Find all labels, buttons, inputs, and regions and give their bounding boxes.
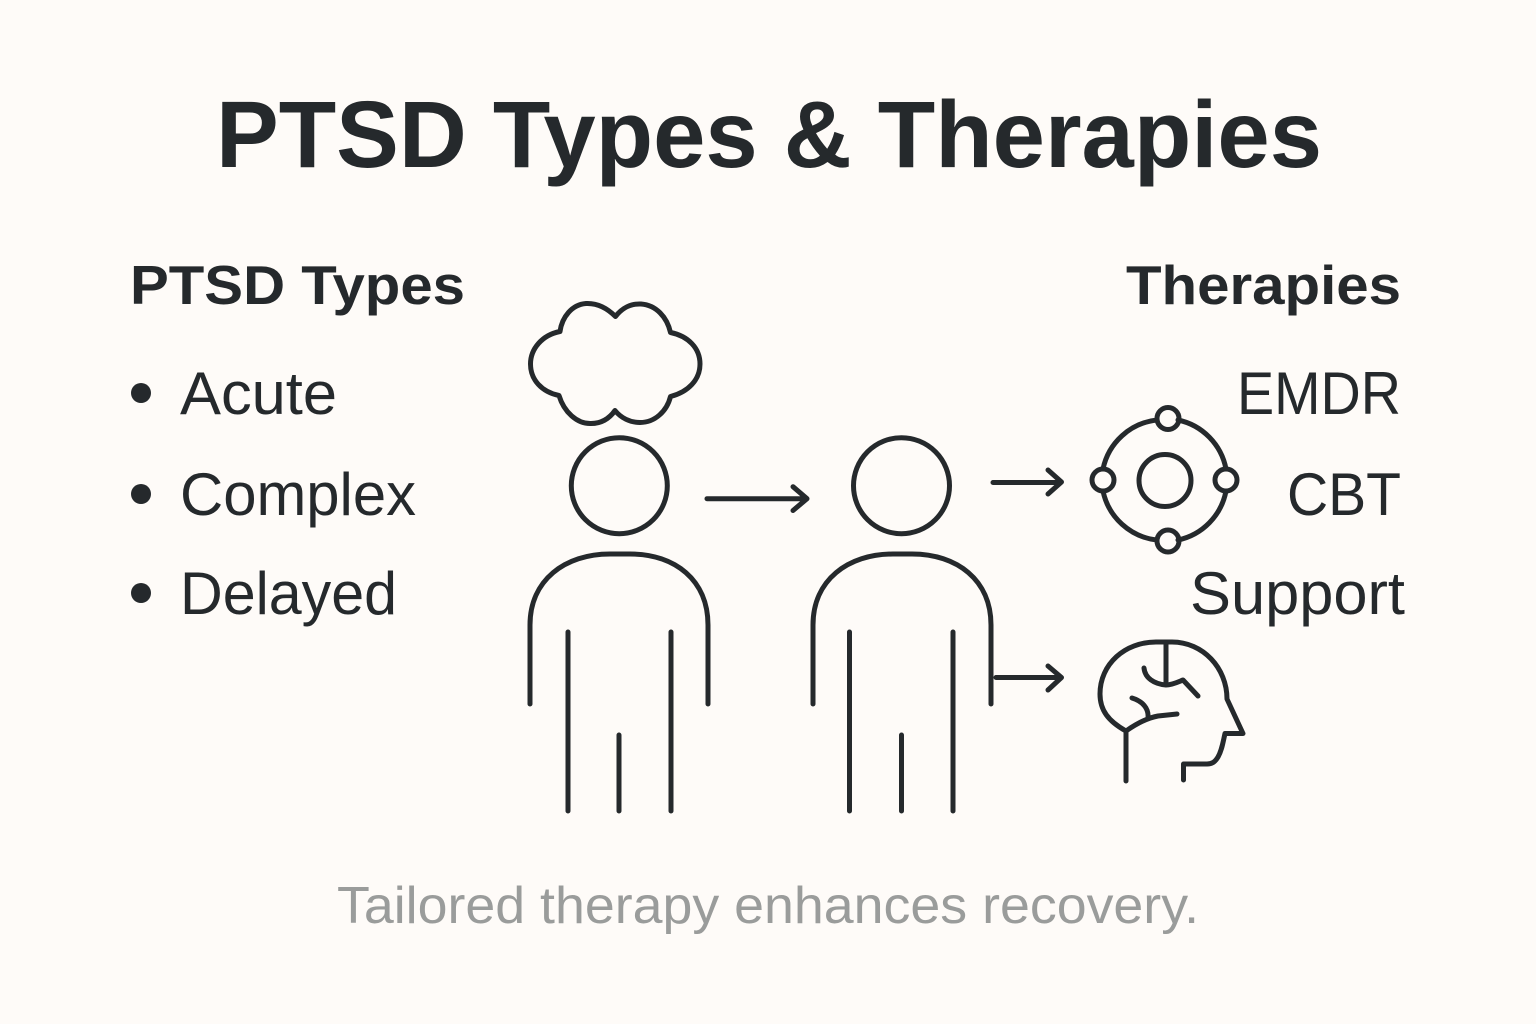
panel: PTSD types list xyxy=(130,254,465,627)
therapy: Support: Support xyxy=(1190,560,1405,627)
icon: head with brain xyxy=(1100,642,1243,781)
arrow: to brain icon xyxy=(996,666,1062,690)
list item: Delayed: Delayed xyxy=(180,560,397,627)
list item: Complex: Complex xyxy=(180,461,416,528)
therapy: EMDR: EMDR xyxy=(1237,360,1401,427)
panel: therapies list xyxy=(1126,254,1405,627)
figure: person with PTSD xyxy=(530,438,708,811)
arrow: to EMDR icon xyxy=(993,470,1062,494)
figure: person in treatment xyxy=(813,438,991,811)
heading: PTSD Types: PTSD Types xyxy=(130,254,465,316)
therapy: CBT: CBT xyxy=(1287,461,1401,528)
title: PTSD Types & Therapies xyxy=(216,82,1322,188)
icon: EMDR eye movement orbit xyxy=(1092,408,1237,552)
heading: Therapies: Therapies xyxy=(1126,254,1401,316)
icon: thought cloud xyxy=(530,303,700,424)
list item: Acute: Acute xyxy=(180,360,337,427)
footer caption: Tailored therapy enhances recovery. xyxy=(337,877,1199,935)
arrow: person to person xyxy=(707,487,807,510)
